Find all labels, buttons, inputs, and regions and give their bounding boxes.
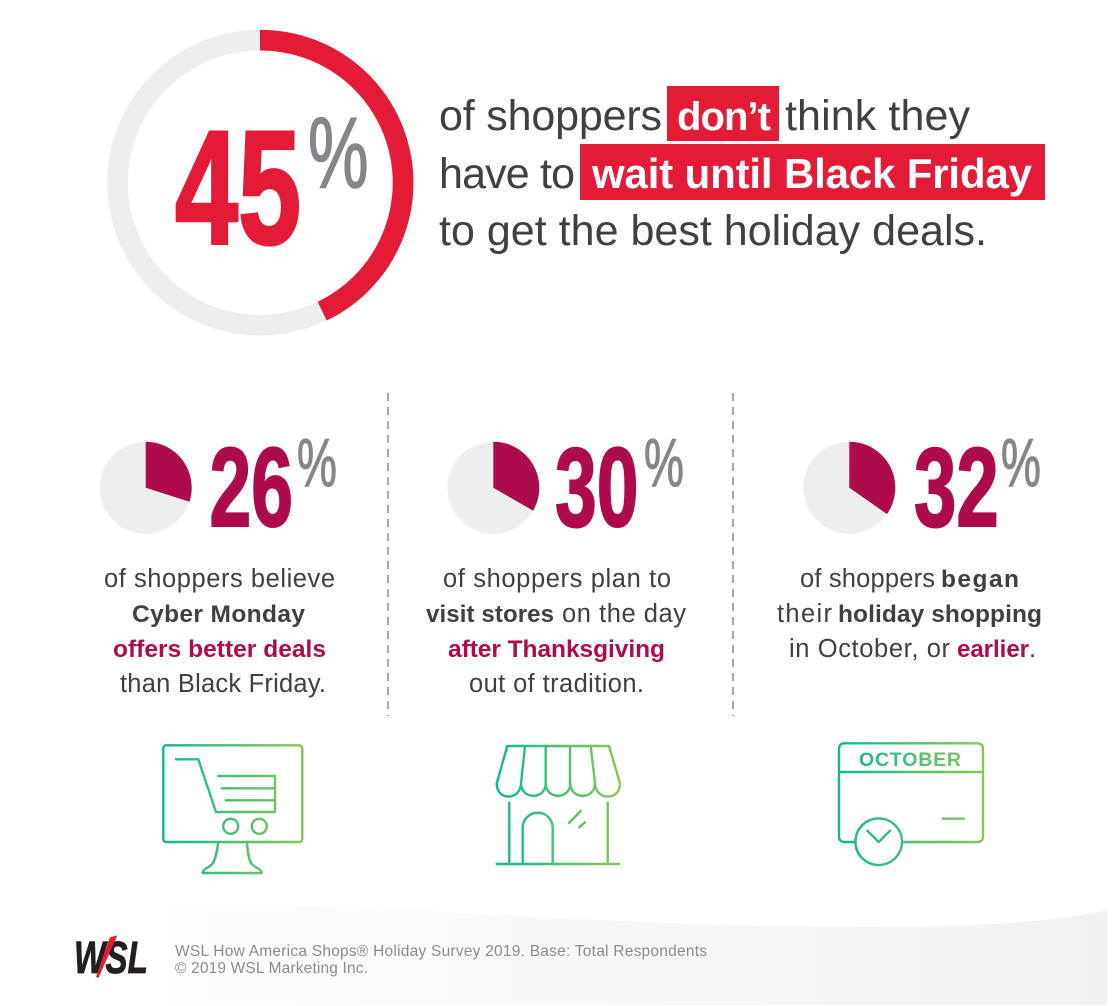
headline text: don’t [677,95,771,139]
text block: holiday shopping: of shoppers [800,565,935,593]
pie chart: 26% [100,442,192,534]
big stat: 45%: 45 [175,96,301,278]
text block: Cyber Monday: than Black Friday. [120,670,326,698]
text block: holiday shopping: in October, or [789,635,950,663]
stat: 32% [914,425,1041,551]
source note: © 2019 WSL Marketing Inc. [175,960,368,977]
donut chart: 45% [118,40,403,325]
source note [175,943,707,977]
stat: 26% [210,426,337,551]
stat: 30%: % [644,426,684,501]
icon: storefront [497,746,620,864]
text block: Cyber Monday: offers better deals [113,636,326,663]
headline text [439,86,1045,255]
pie chart: 32% [803,442,895,534]
pie chart: 30% [447,442,539,534]
text block: holiday shopping: began [941,566,1019,593]
stat: 32%: % [1001,426,1041,501]
text block: holiday shopping: holiday shopping [838,601,1042,628]
text block: Cyber Monday: Cyber Monday [132,601,305,628]
headline text: of shoppers [439,92,662,140]
text block: Cyber Monday [104,565,335,698]
headline text: have to [439,150,575,198]
text block: holiday shopping [777,565,1042,663]
stat: 26%: % [297,426,337,501]
stat: 26%: 26 [210,426,293,551]
footer wave background [174,905,1107,1005]
icon: shopping cart on monitor [163,745,302,873]
icon: October calendar with clock [839,743,983,865]
divider [732,393,734,716]
text block: holiday shopping: their [777,600,832,628]
stat: 30% [555,426,684,551]
text block: visit stores: of shoppers plan to [443,565,671,593]
headline text: think they [785,92,970,140]
icon: October calendar with clock: OCTOBER [859,749,961,771]
text block: visit stores: after Thanksgiving [448,636,665,663]
text block: holiday shopping: earlier [957,636,1029,663]
text block: visit stores: out of tradition. [469,670,644,698]
headline text: to get the best holiday deals. [439,207,987,255]
divider [387,393,389,716]
logo: WSL: WSL [74,933,148,983]
text block: visit stores: visit stores [426,601,554,628]
stat: 32%: 32 [914,425,999,551]
text block: visit stores: on the day [562,600,686,628]
text block: visit stores [426,565,686,698]
text block: Cyber Monday: of shoppers believe [104,565,335,593]
big stat: 45% [175,96,368,278]
text block: holiday shopping: . [1029,635,1036,663]
stat: 30%: 30 [555,426,638,551]
headline text: wait until Black Friday [591,150,1033,197]
source note: WSL How America Shops® Holiday Survey 2019. Base: Total Respondents [175,943,707,960]
big stat: 45%: % [308,99,368,210]
